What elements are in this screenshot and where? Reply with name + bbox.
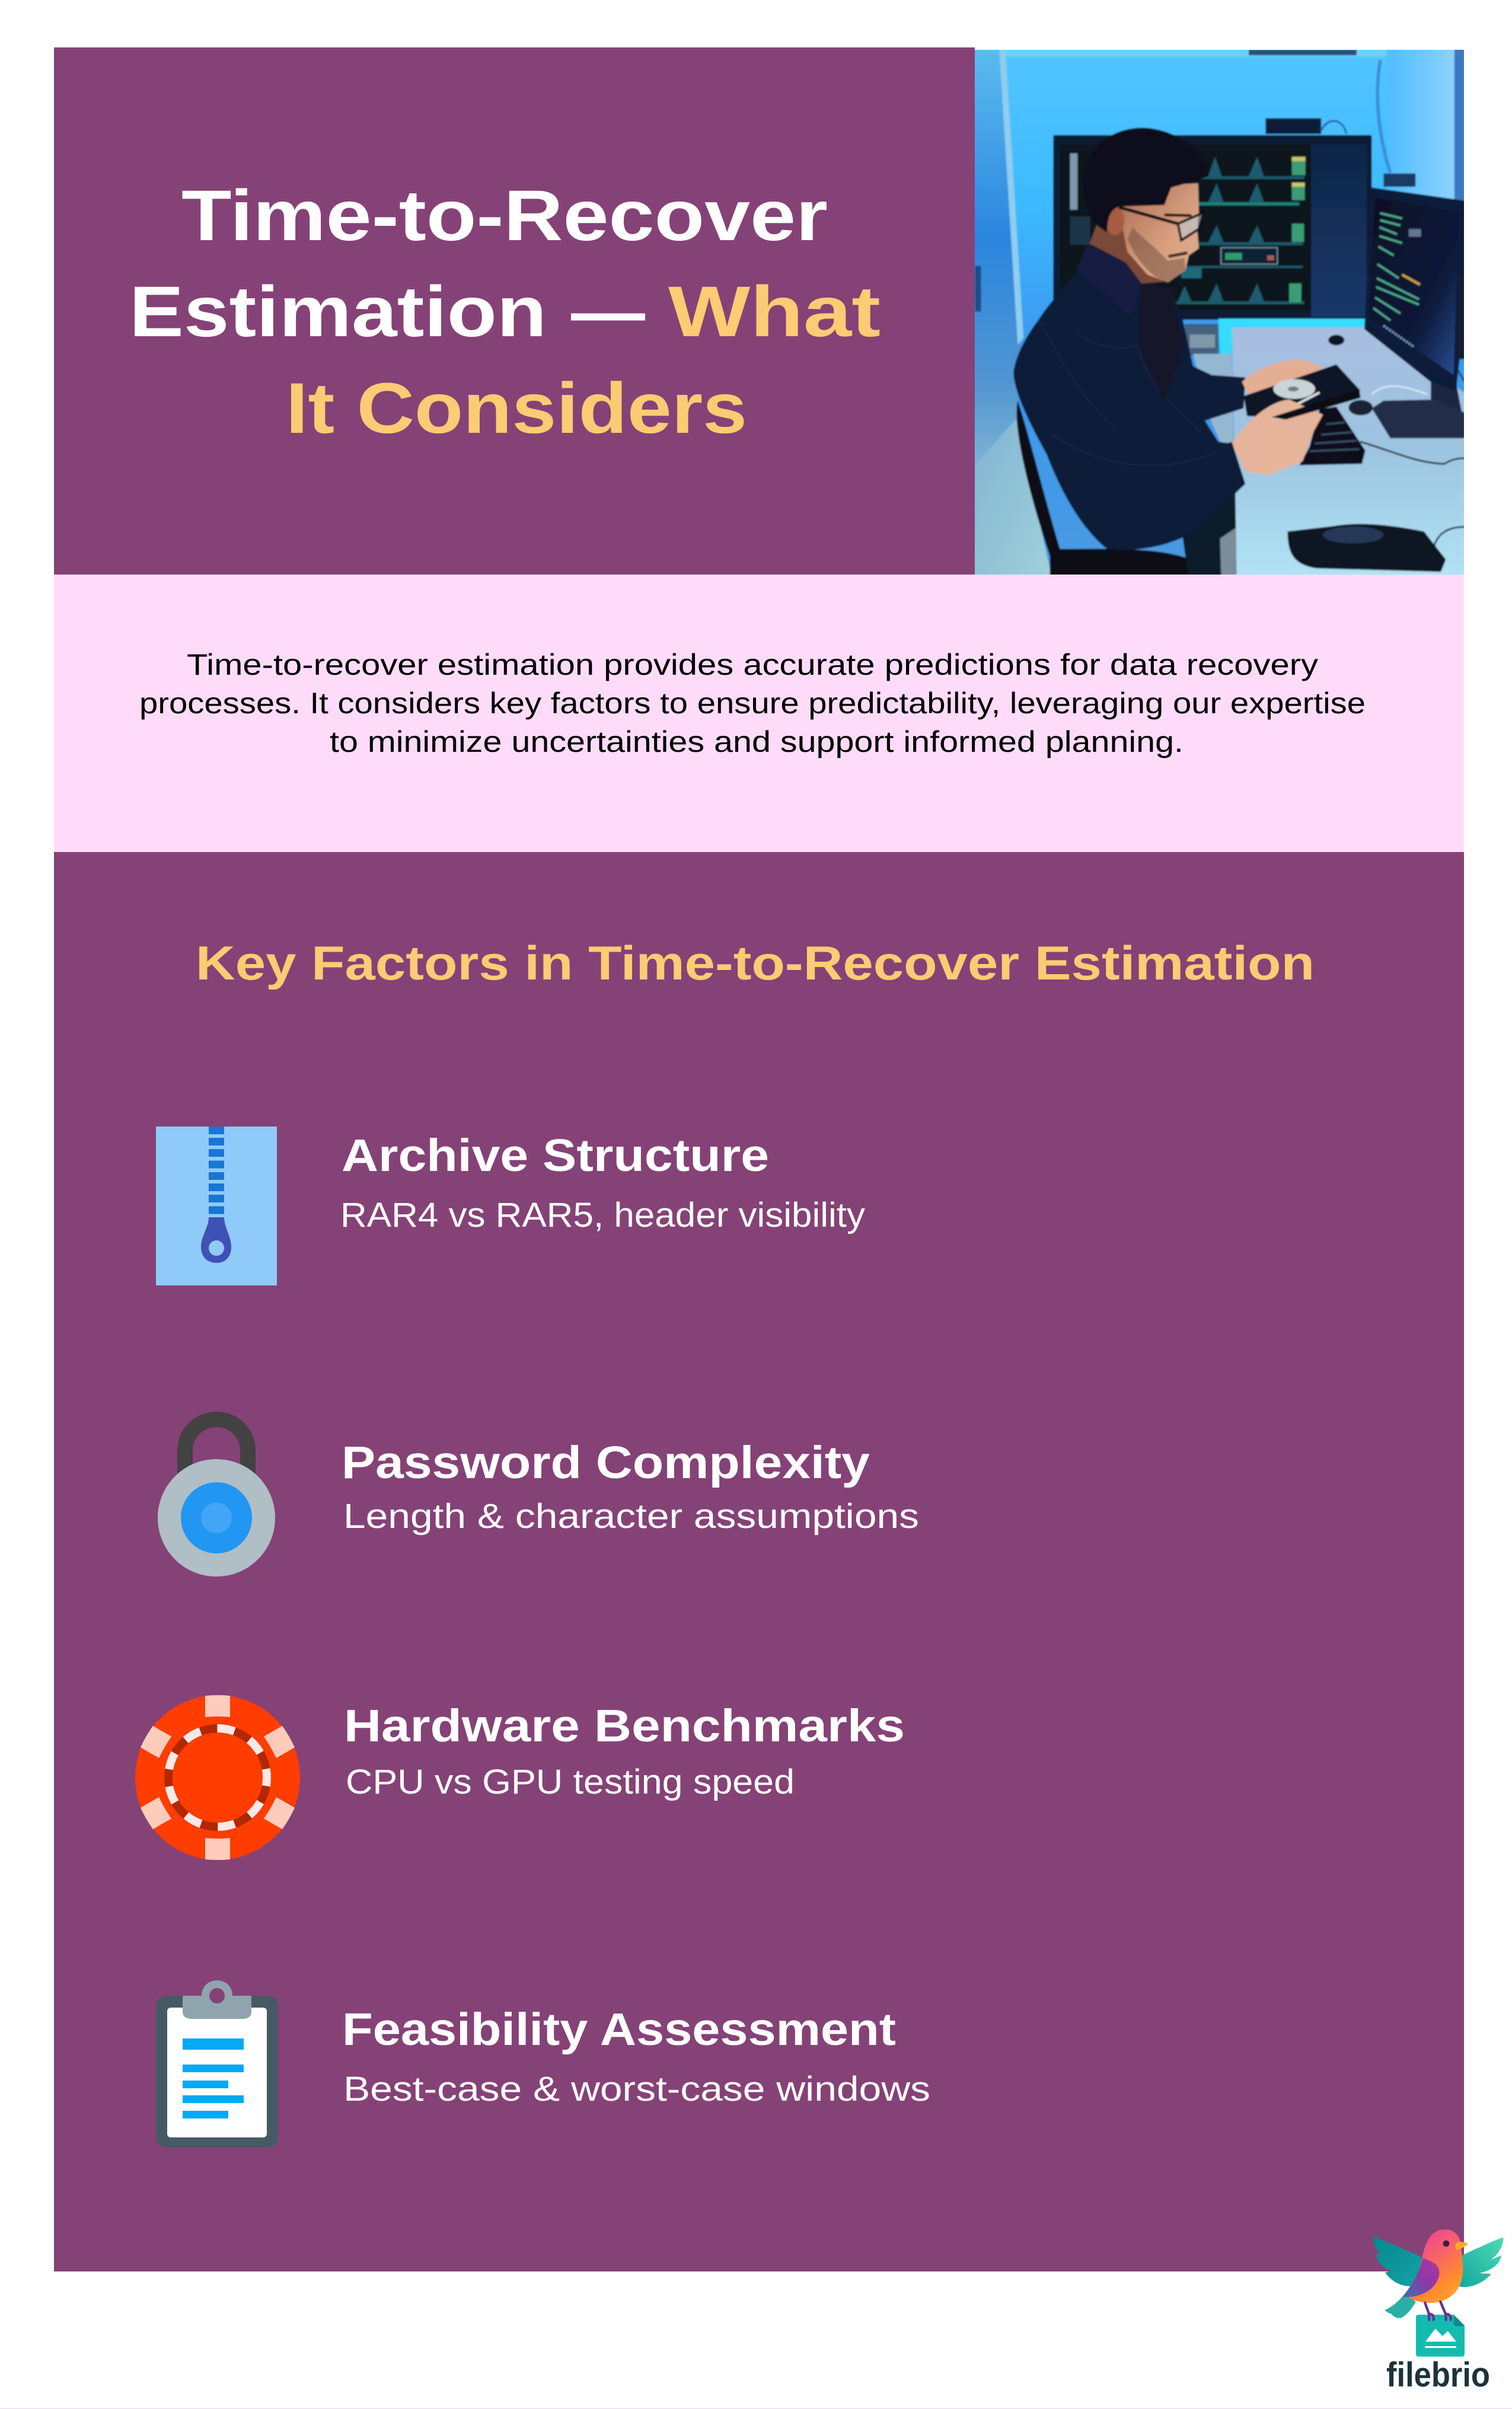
factor text: Password Complexity [342,1437,870,1488]
title text: Estimation [129,271,547,352]
neck and face [1090,224,1168,283]
factor text: Archive Structure [342,1130,769,1181]
title text: — [571,271,645,352]
factor text: Feasibility Assessment [342,2004,896,2055]
factor: feasibility assessment [156,1980,930,2148]
factor text [342,1437,919,1536]
mouse pad [1287,524,1446,572]
factor text: RAR4 vs RAR5, header visibility [340,1196,865,1234]
title text: What [668,271,881,352]
logo wordmark: filebrio [1386,2356,1490,2394]
section heading: Key Factors in Time-to-Recover Estimation [196,937,1315,990]
factor text: Best-case & worst-case windows [343,2070,930,2108]
title text: It Considers [286,368,747,448]
panel: hero photo of technician at workstation [975,50,1464,575]
icon: chip [135,1695,300,1860]
title text [129,175,881,448]
factor text: Length & character assumptions [343,1497,919,1536]
intro paragraph [139,648,1366,758]
keyboard [1299,407,1366,465]
factor text: Hardware Benchmarks [344,1700,905,1751]
panel: key factors [54,852,1464,2271]
factor text [342,2004,930,2108]
factor: archive structure [156,1127,865,1285]
icon: clipboard [156,1980,278,2148]
icon: lock [158,1412,275,1577]
intro paragraph: processes. It considers key factors to ensure predictability, leveraging our expertise [139,687,1366,720]
logo: filebrio bird [1373,2229,1503,2394]
right monitor [1364,186,1464,439]
panel: title block [54,47,975,575]
hard drive in hands [1242,360,1323,395]
factor text: CPU vs GPU testing speed [346,1763,795,1801]
factor: password complexity [158,1412,919,1577]
icon: zipped archive [156,1127,277,1285]
title text: Time-to-Recover [181,175,828,256]
panel: introduction [54,575,1464,852]
chair [1015,400,1189,575]
intro paragraph: to minimize uncertainties and support informed planning. [330,725,1184,758]
shirt [1013,245,1245,550]
factor: hardware benchmarks [135,1695,905,1860]
trousers [1181,493,1237,575]
factor text [344,1700,905,1801]
intro paragraph: Time-to-recover estimation provides accurate predictions for data recovery [187,648,1318,681]
factor text [340,1130,865,1234]
